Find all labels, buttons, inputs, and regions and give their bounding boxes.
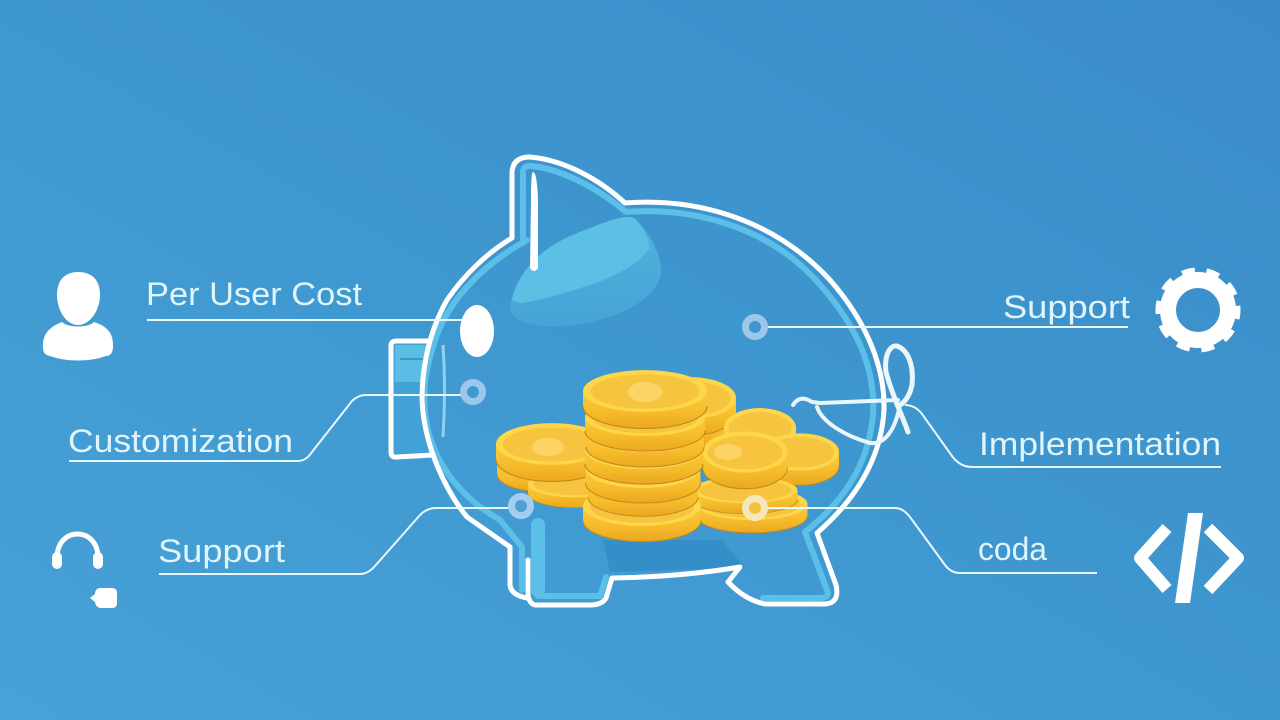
callout: Support right: Support bbox=[1003, 289, 1130, 325]
coin stack: right bbox=[692, 408, 839, 533]
pig ear highlight bbox=[530, 172, 538, 271]
callout: Support left bbox=[158, 496, 530, 574]
callout: Support right bbox=[746, 289, 1130, 336]
callout: coda bbox=[746, 498, 1097, 573]
coin stack: back right bbox=[644, 377, 736, 445]
icon: headset with chat bubble bbox=[52, 534, 117, 608]
pig belly shadow bbox=[603, 540, 745, 572]
pig inner light-blue band bbox=[424, 166, 873, 598]
icon: gear bbox=[1155, 267, 1241, 353]
callout: coda: coda bbox=[978, 531, 1047, 567]
callout: Per User Cost: Per User Cost bbox=[146, 276, 362, 312]
icon: user bbox=[43, 272, 113, 360]
pig head dome highlight bbox=[510, 217, 661, 326]
callout: Support left: Support bbox=[158, 533, 285, 569]
coin stack: centre bbox=[583, 370, 707, 542]
callout: Customization: Customization bbox=[68, 423, 293, 459]
pig eye bbox=[460, 305, 494, 357]
coin stack: left bbox=[496, 423, 622, 508]
callout: Customization bbox=[68, 382, 482, 461]
pig curly tail bbox=[793, 346, 912, 443]
pig snout bbox=[391, 341, 444, 457]
callout: Implementation bbox=[905, 405, 1221, 467]
gold coins bbox=[496, 370, 839, 542]
pig body outline bbox=[422, 157, 884, 605]
piggy bank illustration bbox=[391, 157, 912, 605]
callout: Implementation: Implementation bbox=[979, 426, 1221, 462]
icon: code brackets bbox=[1140, 513, 1238, 603]
